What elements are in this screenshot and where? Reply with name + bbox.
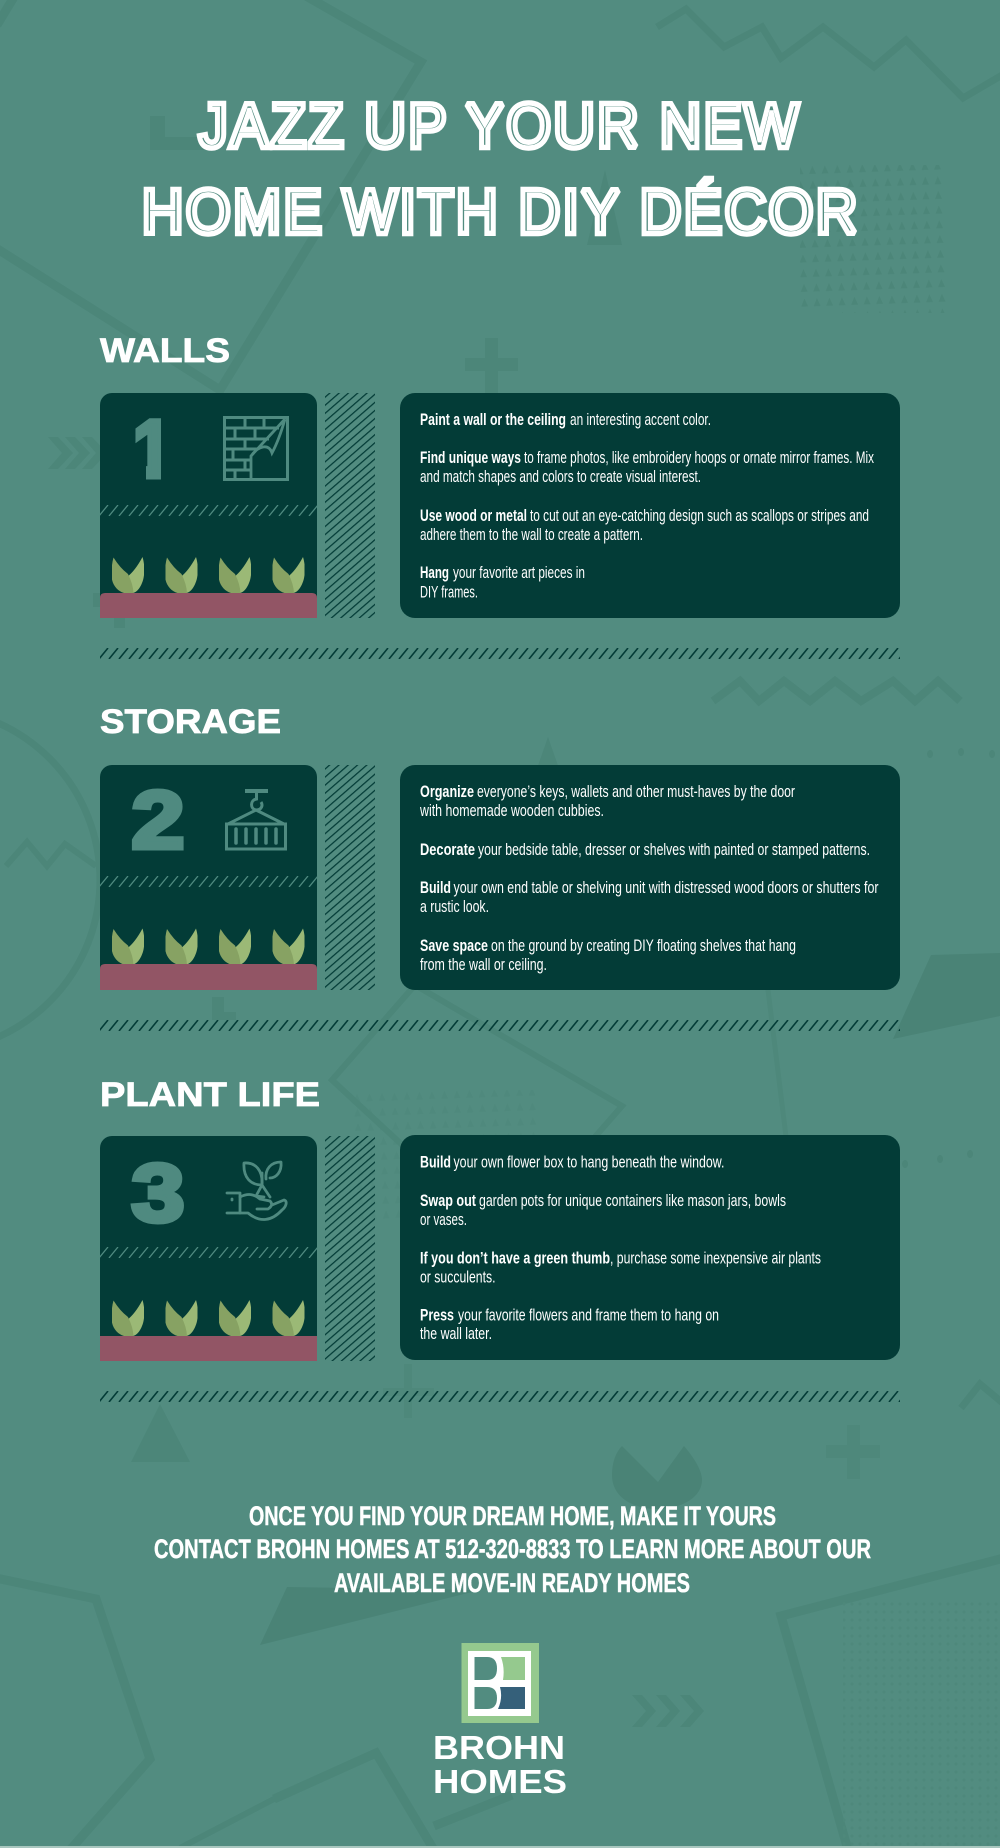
panel: plant life tips: your own flower box to hang beneath the window. — [454, 1154, 724, 1172]
number 3: 3 — [132, 1148, 184, 1239]
panel: walls tips: Paint a wall or the ceiling — [420, 411, 566, 429]
panel: plant life tips: , purchase some inexpensive air plants — [610, 1250, 821, 1268]
panel: storage tips: Save space — [420, 937, 488, 955]
panel: storage tips: Organize — [420, 783, 474, 801]
planter bar — [100, 1336, 317, 1361]
title: JAZZ UP YOUR NEW — [199, 92, 801, 161]
divider 3 — [100, 1391, 900, 1402]
panel: number card 2 — [100, 765, 317, 990]
icon: brick wall with peeling corner — [224, 418, 288, 480]
call to action — [154, 1501, 871, 1598]
title: HOME WITH DIY DÉCOR — [142, 178, 860, 247]
section 2: storage — [100, 703, 900, 990]
divider 1 — [100, 648, 900, 659]
logo wordmark — [433, 1729, 567, 1800]
heading: plant life: PLANT LIFE — [100, 1076, 320, 1114]
panel: walls tips: adhere them to the wall to create a pattern. — [420, 526, 643, 544]
panel: walls tips — [400, 393, 900, 618]
panel: plant life tips: or vases. — [420, 1211, 467, 1229]
panel: walls tips: and match shapes and colors to create visual interest. — [420, 468, 701, 486]
panel: storage tips: Build — [420, 879, 451, 897]
logo wordmark: BROHN — [433, 1729, 565, 1766]
row of plants — [112, 928, 305, 964]
panel: number card 3 — [100, 1136, 317, 1361]
hatch band — [100, 1247, 317, 1258]
panel: storage tips: Decorate — [420, 841, 475, 859]
heading: storage: STORAGE — [100, 703, 281, 741]
call to action: ONCE YOU FIND YOUR DREAM HOME, MAKE IT YOURS — [249, 1501, 776, 1531]
panel: plant life tips: your favorite flowers and frame them to hang on — [458, 1306, 719, 1324]
hatched side strip — [325, 765, 375, 990]
panel: walls tips: an interesting accent color. — [570, 411, 711, 429]
panel: storage tips: on the ground by creating DIY floating shelves that hang — [491, 937, 796, 955]
row of plants — [112, 557, 305, 593]
number 1: 1 — [133, 404, 173, 495]
logo: Brohn Homes — [433, 1643, 567, 1800]
panel: walls tips: DIY frames. — [420, 584, 478, 602]
icon: hanging container — [226, 789, 286, 849]
hatch band — [100, 876, 317, 887]
panel: storage tips — [400, 765, 900, 990]
hatched side strip — [325, 393, 375, 618]
section 3: plant life — [100, 1076, 900, 1361]
panel: walls tips: Find unique ways — [420, 449, 521, 467]
bottom edge strip — [0, 1846, 1000, 1848]
panel: storage tips: with homemade wooden cubbies. — [419, 802, 604, 820]
hatched side strip — [325, 1136, 375, 1361]
section 1: walls — [100, 332, 900, 618]
panel: storage tips: a rustic look. — [420, 898, 489, 916]
planter bar — [100, 964, 317, 990]
panel: walls tips: to cut out an eye-catching design such as scallops or stripes and — [530, 507, 869, 525]
logo mark — [462, 1643, 539, 1723]
panel: plant life tips: garden pots for unique containers like mason jars, bowls — [479, 1192, 786, 1210]
panel: plant life tips: the wall later. — [420, 1325, 492, 1343]
panel: plant life tips: Press — [420, 1306, 454, 1324]
call to action: AVAILABLE MOVE-IN READY HOMES — [334, 1568, 690, 1598]
panel: plant life tips: Build — [420, 1154, 451, 1172]
divider 2 — [100, 1020, 900, 1031]
heading: walls: WALLS — [100, 332, 230, 370]
title — [142, 92, 860, 247]
logo wordmark: HOMES — [433, 1763, 567, 1800]
panel: walls tips: Hang — [420, 564, 449, 582]
title: JAZZ UP YOUR NEW — [199, 92, 801, 161]
panel: walls tips: Use wood or metal — [420, 507, 527, 525]
panel: walls tips: your favorite art pieces in — [453, 564, 585, 582]
panel: plant life tips: or succulents. — [420, 1268, 496, 1286]
title: HOME WITH DIY DÉCOR — [142, 178, 860, 247]
panel: number card 1 — [100, 393, 317, 618]
panel: plant life tips — [400, 1135, 900, 1360]
panel: plant life tips: Swap out — [420, 1192, 476, 1210]
hatch band — [100, 505, 317, 516]
background dot patterns — [350, 165, 1000, 1848]
planter bar — [100, 593, 317, 618]
panel: storage tips: everyone’s keys, wallets and other must-haves by the door — [477, 783, 795, 801]
panel: plant life tips: If you don’t have a green thumb — [420, 1250, 610, 1268]
panel: storage tips: your bedside table, dresser or shelves with painted or stamped patterns. — [478, 841, 870, 859]
icon: hand holding sprout — [227, 1162, 286, 1219]
number 2: 2 — [132, 775, 184, 866]
row of plants — [112, 1300, 305, 1336]
panel: storage tips: from the wall or ceiling. — [420, 956, 547, 974]
